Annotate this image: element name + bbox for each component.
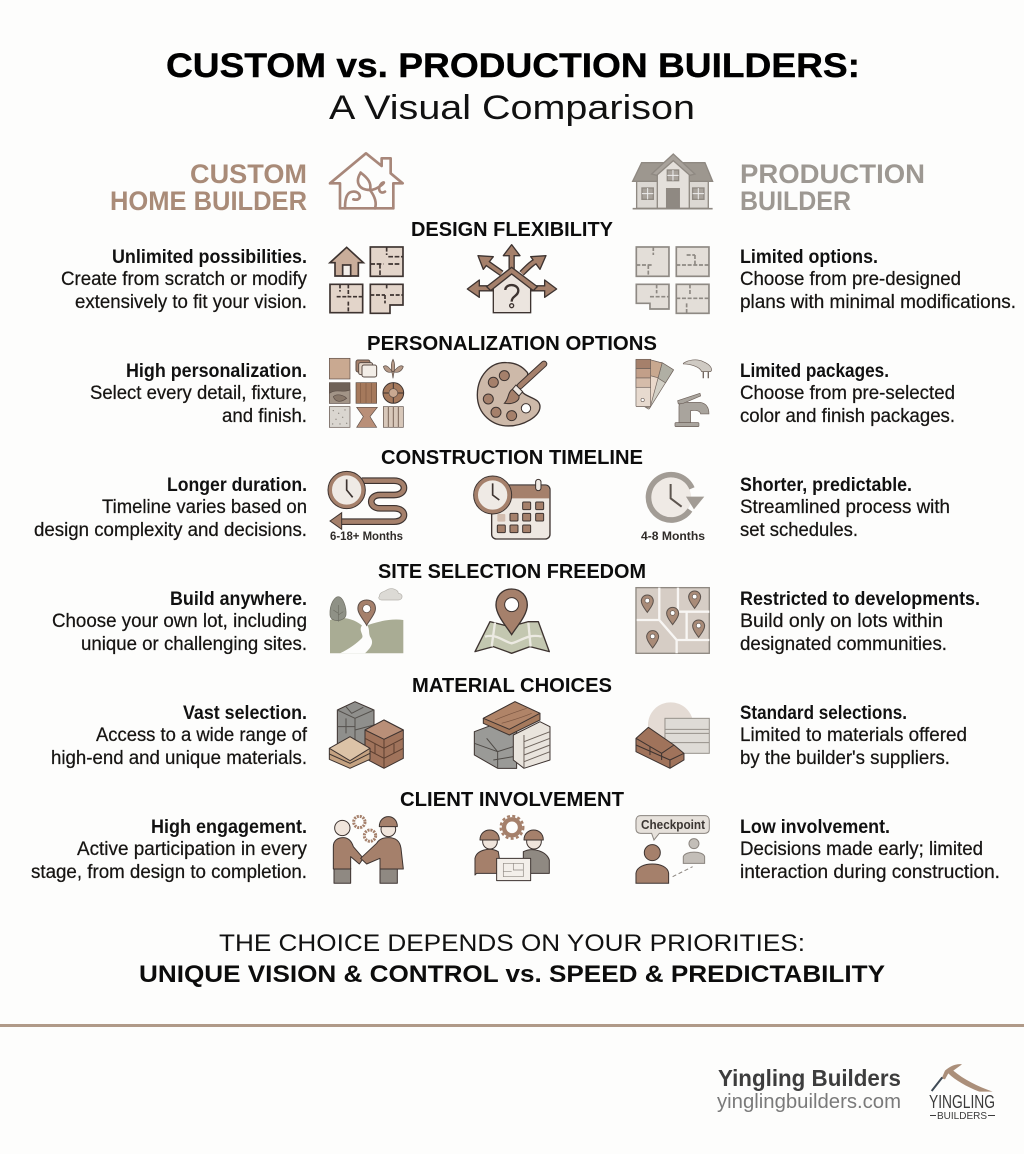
- icon: house with options arrows: [467, 245, 557, 313]
- custom text: extensively to fit your vision.: [75, 291, 307, 313]
- production text: by the builder's suppliers.: [740, 747, 950, 769]
- production text: Choose from pre-selected: [740, 382, 955, 404]
- conclusion: [139, 930, 885, 988]
- icon: custom floor plans: [330, 247, 403, 313]
- footer text: yinglingbuilders.com: [717, 1091, 901, 1113]
- icon: paint palette and brush: [477, 363, 544, 426]
- logo: Yingling Builders: [929, 1064, 995, 1122]
- icon: production house: [633, 154, 713, 209]
- icon: stacked materials: [474, 702, 550, 768]
- column header: custom home builder: [110, 159, 307, 216]
- column header: custom home builder: HOME BUILDER: [110, 186, 307, 216]
- custom text: Choose your own lot, including: [52, 610, 307, 632]
- footer divider: [0, 1024, 1024, 1027]
- label: custom duration: 6-18+ Months: [330, 531, 403, 543]
- production text: Decisions made early; limited: [740, 838, 983, 860]
- custom text: [52, 588, 307, 655]
- custom text: Create from scratch or modify: [61, 268, 307, 290]
- logo: Yingling Builders: YINGLING: [929, 1092, 995, 1112]
- icon: clock and calendar: [474, 476, 550, 539]
- conclusion: UNIQUE VISION & CONTROL vs. SPEED & PREDICTABILITY: [139, 961, 885, 988]
- custom text: Vast selection.: [183, 702, 307, 724]
- footer text: [717, 1065, 901, 1113]
- column header: production builder: BUILDER: [740, 186, 851, 216]
- label: production duration: 4-8 Months: [641, 531, 705, 543]
- icon: subdivision map with pins: [636, 588, 709, 653]
- footer text: Yingling Builders: [718, 1065, 901, 1091]
- production text: Choose from pre-designed: [740, 268, 961, 290]
- icon: brick and siding: [636, 702, 709, 768]
- production text: interaction during construction.: [740, 861, 1000, 883]
- custom text: [61, 246, 307, 313]
- custom text: Build anywhere.: [170, 588, 307, 610]
- icon: checkpoint speech bubble and clients: [636, 816, 709, 883]
- label: checkpoint: Checkpoint: [641, 818, 706, 832]
- section: site selection freedom: [52, 561, 980, 655]
- column header: production builder: [740, 159, 925, 216]
- production text: [740, 816, 1000, 883]
- custom text: Longer duration.: [167, 474, 307, 496]
- section: construction timeline: [34, 447, 950, 543]
- production text: Limited to materials offered: [740, 724, 967, 746]
- production text: [740, 702, 967, 769]
- production text: Limited options.: [740, 246, 878, 268]
- icon: builders with blueprint: [475, 816, 549, 881]
- heading: PERSONALIZATION OPTIONS: [367, 333, 657, 355]
- section: material choices: [51, 675, 967, 769]
- custom text: Active participation in every: [77, 838, 307, 860]
- title: A Visual Comparison: [329, 89, 695, 127]
- custom text: [34, 474, 307, 541]
- heading: MATERIAL CHOICES: [412, 675, 612, 697]
- custom text: [90, 360, 307, 427]
- section: design flexibility: [61, 219, 1016, 313]
- custom text: high-end and unique materials.: [51, 747, 307, 769]
- custom text: Unlimited possibilities.: [112, 246, 307, 268]
- production text: Build only on lots within: [740, 610, 943, 632]
- custom text: unique or challenging sites.: [81, 633, 307, 655]
- production text: color and finish packages.: [740, 405, 955, 427]
- production text: [740, 588, 980, 655]
- custom text: Select every detail, fixture,: [90, 382, 307, 404]
- production text: Low involvement.: [740, 816, 890, 838]
- production text: Limited packages.: [740, 360, 889, 382]
- icon: client and builder handshake: [333, 816, 403, 883]
- title: CUSTOM vs. PRODUCTION BUILDERS:: [166, 47, 860, 85]
- section: client involvement: [31, 789, 1000, 883]
- production text: [740, 474, 950, 541]
- custom text: Access to a wide range of: [96, 724, 308, 746]
- heading: SITE SELECTION FREEDOM: [378, 561, 646, 583]
- column header: production builder: PRODUCTION: [740, 159, 925, 189]
- icon: landscape with pin: [330, 589, 403, 653]
- production text: Streamlined process with: [740, 496, 950, 518]
- icon: winding timeline with clock: [328, 471, 404, 529]
- custom text: and finish.: [222, 405, 307, 427]
- icon: custom house with swirl: [330, 153, 403, 208]
- production text: set schedules.: [740, 519, 858, 541]
- production text: Restricted to developments.: [740, 588, 980, 610]
- production text: [740, 246, 1016, 313]
- conclusion: THE CHOICE DEPENDS ON YOUR PRIORITIES:: [219, 930, 805, 957]
- custom text: Timeline varies based on: [102, 496, 307, 518]
- production text: plans with minimal modifications.: [740, 291, 1016, 313]
- custom text: High personalization.: [126, 360, 307, 382]
- heading: DESIGN FLEXIBILITY: [411, 219, 614, 241]
- heading: CLIENT INVOLVEMENT: [400, 789, 624, 811]
- production text: designated communities.: [740, 633, 947, 655]
- icon: stone, brick and wood: [329, 702, 403, 768]
- title: [166, 47, 860, 127]
- custom text: High engagement.: [151, 816, 307, 838]
- icon: color fan and fixtures: [636, 359, 712, 427]
- icon: map with large pin: [475, 589, 549, 653]
- icon: clock with circular arrow: [648, 475, 704, 520]
- heading: CONSTRUCTION TIMELINE: [381, 447, 643, 469]
- production text: Standard selections.: [740, 702, 907, 724]
- production text: Shorter, predictable.: [740, 474, 912, 496]
- custom text: [31, 816, 307, 883]
- custom text: [51, 702, 308, 769]
- section: personalization options: [90, 333, 955, 427]
- icon: finish sample tiles: [329, 358, 404, 427]
- logo: Yingling Builders: BUILDERS: [937, 1110, 987, 1122]
- production text: [740, 360, 955, 427]
- icon: production floor plans: [636, 247, 709, 313]
- column header: custom home builder: CUSTOM: [190, 159, 307, 189]
- custom text: design complexity and decisions.: [34, 519, 307, 541]
- custom text: stage, from design to completion.: [31, 861, 307, 883]
